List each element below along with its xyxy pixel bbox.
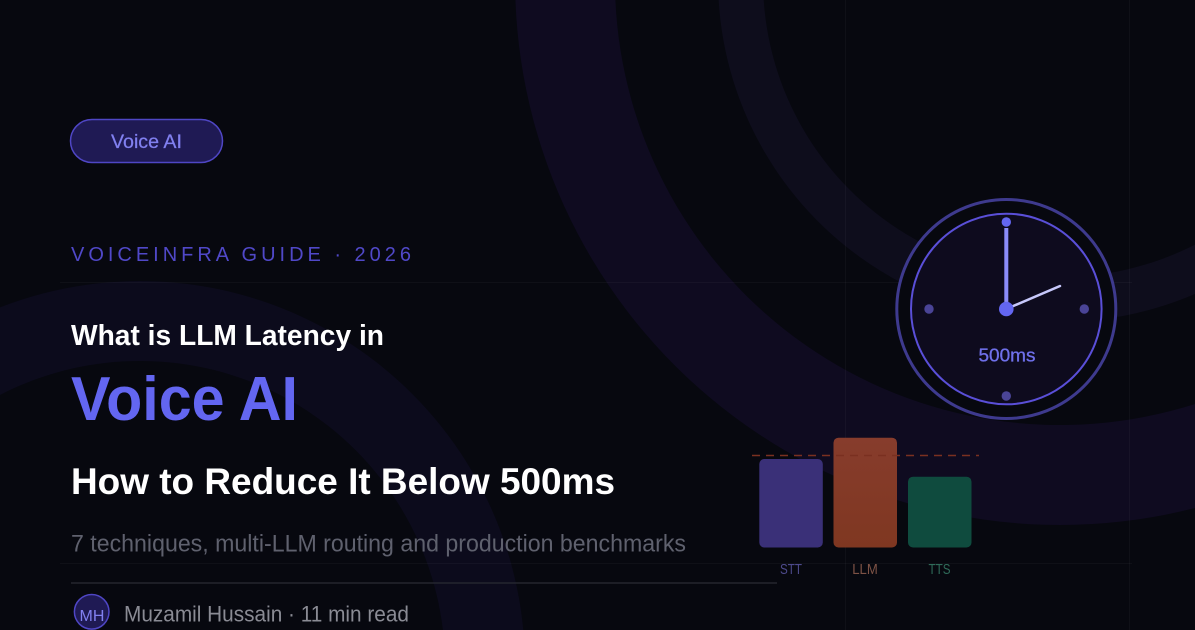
- icon: clock: [897, 200, 1116, 418]
- bar chart: latency by stage: [752, 438, 979, 578]
- icon: clock: 500ms: [978, 346, 1036, 366]
- label: STT: STT: [780, 562, 802, 578]
- title line 3: How to Reduce It Below 500ms: [71, 461, 615, 502]
- bar: LLM: [834, 438, 897, 548]
- title highlight: Voice AI: Voice AI: [71, 365, 298, 434]
- 500ms threshold line: [752, 454, 979, 456]
- bar: TTS: [908, 477, 972, 548]
- label: TTS: TTS: [928, 562, 950, 578]
- divider: [71, 582, 777, 584]
- kicker text: VOICEINFRA GUIDE · 2026: [71, 244, 411, 266]
- category pill: Voice AI: Voice AI: [111, 132, 182, 153]
- label: LLM: LLM: [852, 562, 878, 578]
- bar: STT: [759, 459, 823, 548]
- title line 1: What is LLM Latency in: [71, 320, 384, 352]
- subtitle: 7 techniques, multi-LLM routing and production benchmarks: [71, 530, 686, 558]
- author avatar: MH: [80, 608, 104, 625]
- author avatar: [74, 594, 109, 629]
- category pill: Voice AI: [70, 120, 222, 162]
- author and read time: Muzamil Hussain · 11 min read: [124, 602, 409, 626]
